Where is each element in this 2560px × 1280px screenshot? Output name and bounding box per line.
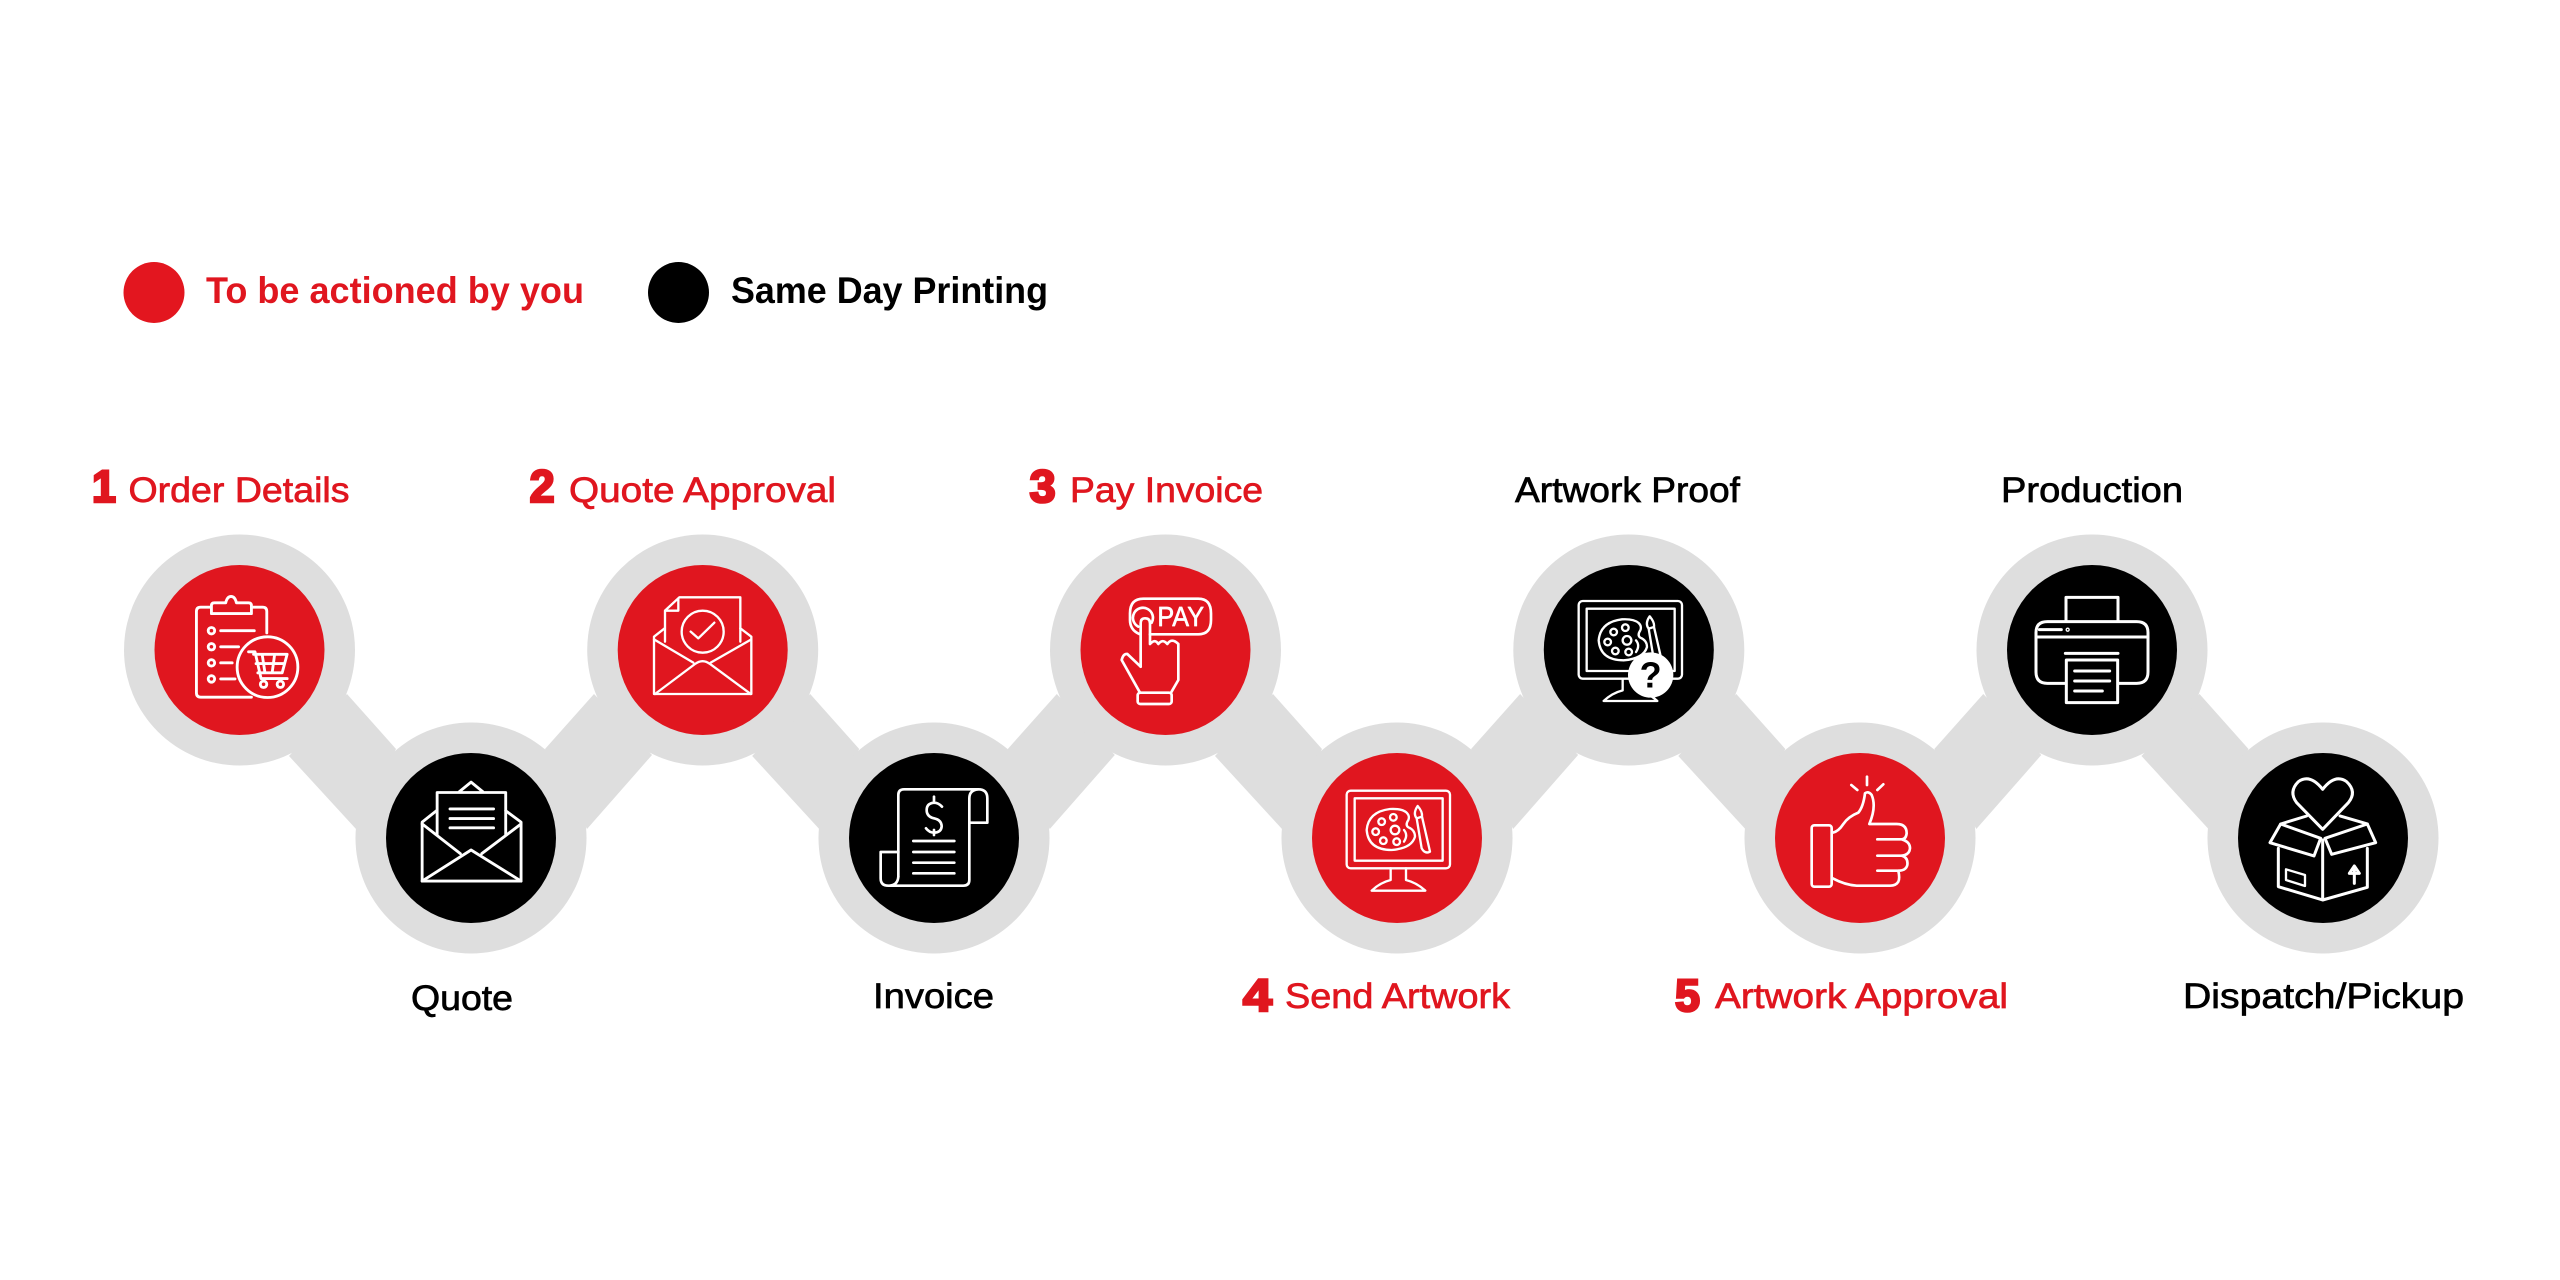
step: pay invoice: [1050, 534, 1281, 766]
label: 5 artwork approval: Artwork Approval: [1715, 977, 2008, 1016]
step: send artwork: [1282, 722, 1512, 954]
step: artwork approval: [1744, 722, 1976, 954]
icon: clipboard with cart: [196, 596, 298, 697]
legend item: to be actioned by you: To be actioned by you: [206, 270, 584, 311]
legend item: same day printing: Same Day Printing: [731, 270, 1048, 311]
step: artwork proof: [1513, 534, 1744, 766]
process path: grey connectors: [289, 694, 2248, 829]
label: 3 pay invoice: 3: [1030, 461, 1056, 512]
label: 4 send artwork: [1243, 970, 1511, 1021]
legend item: to be actioned by you: [124, 262, 584, 323]
icon: thumbs up: [1812, 777, 1910, 887]
icon: open box with heart: [2270, 779, 2376, 900]
icon: monitor with palette: [1347, 791, 1450, 891]
label: 5 artwork approval: [1675, 970, 2008, 1021]
label: 2 quote approval: 2: [530, 461, 555, 512]
label: 1 order details: [92, 461, 350, 512]
label: 3 pay invoice: Pay Invoice: [1070, 471, 1263, 510]
label: artwork proof: Artwork Proof: [1515, 471, 1740, 510]
icon: envelope with letter: [422, 782, 521, 881]
label: production: Production: [2001, 471, 2183, 510]
step: quote: [356, 722, 586, 954]
label: 4 send artwork: 4: [1243, 970, 1272, 1021]
step: quote approval: [587, 534, 818, 766]
icon: monitor with palette and question mark: [1579, 601, 1682, 701]
step: production: [1976, 534, 2208, 766]
step: order details: [124, 534, 355, 766]
legend: [124, 262, 1048, 323]
label: 2 quote approval: Quote Approval: [569, 471, 836, 510]
label: 3 pay invoice: [1030, 461, 1263, 512]
icon: monitor with palette and question mark: ?: [1640, 655, 1662, 696]
label: 1 order details: Order Details: [128, 471, 350, 510]
icon: hand pressing pay button: [1122, 599, 1211, 704]
label: invoice: Invoice: [873, 977, 994, 1016]
icon: envelope with approved document: [654, 597, 751, 694]
label: 4 send artwork: Send Artwork: [1285, 977, 1511, 1016]
label: quote: Quote: [411, 979, 513, 1018]
label: 2 quote approval: [530, 461, 836, 512]
icon: printer: [2036, 597, 2148, 703]
icon: hand pressing pay button: PAY: [1157, 601, 1204, 632]
label: dispatch / pickup: Dispatch/Pickup: [2183, 977, 2464, 1016]
label: 5 artwork approval: 5: [1675, 970, 1700, 1021]
label: 1 order details: 1: [92, 461, 116, 512]
step: invoice: [818, 722, 1050, 954]
step: dispatch or pickup: [2208, 722, 2438, 954]
legend item: same day printing: [648, 262, 1048, 323]
icon: invoice scroll: [881, 789, 987, 886]
